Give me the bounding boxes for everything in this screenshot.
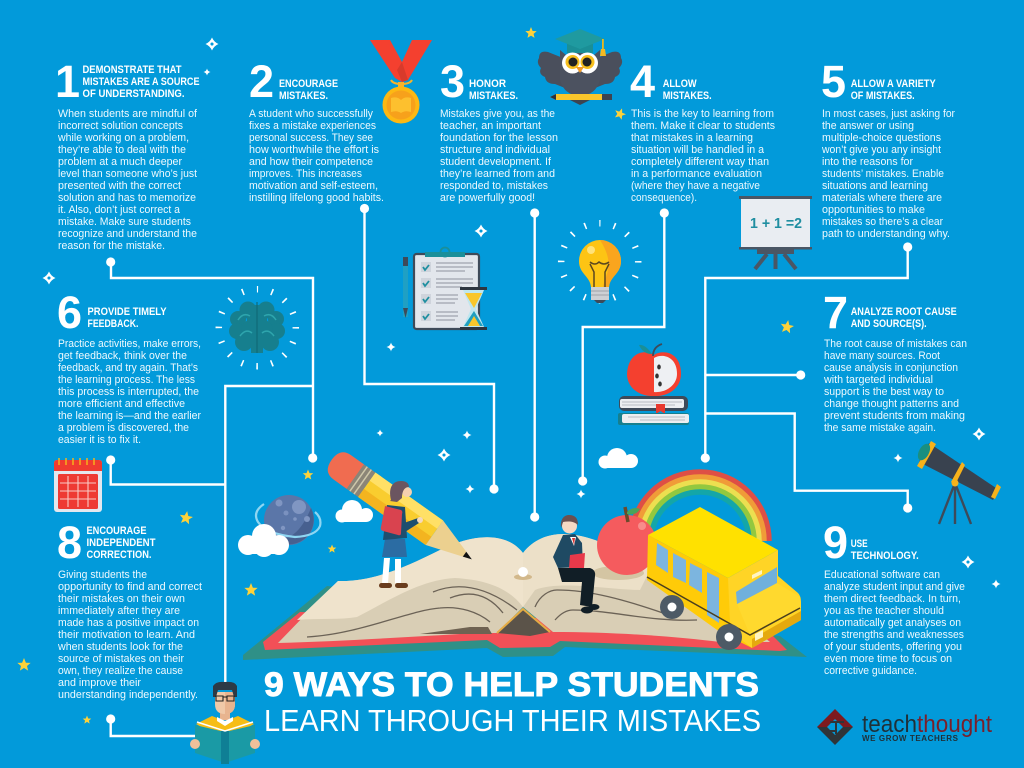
panel: tip 5 (821, 56, 955, 240)
body 6 (58, 338, 201, 446)
body 5: situations and learning (822, 180, 928, 192)
body 7: The root cause of mistakes can (824, 338, 967, 350)
body 9: analyze student input and give (824, 581, 965, 593)
heading 1 (82, 64, 200, 100)
icon: clipboard and hourglass (403, 248, 487, 330)
body 8: opportunity to find and correct (58, 581, 202, 593)
body 1: solution and has to memorize (58, 192, 196, 204)
body 6: easier it is to fix it. (58, 434, 141, 446)
body 9: automatically get analyses on (824, 617, 961, 629)
heading 5 (851, 78, 936, 102)
body 2: how worthwhile the effort is (249, 144, 380, 156)
heading 9: TECHNOLOGY. (851, 550, 919, 562)
body 7: cause analysis in conjunction (824, 362, 958, 374)
body 4: them. Make it clear to students (631, 120, 776, 132)
heading 9 (851, 538, 919, 562)
number 5: 5 (821, 56, 846, 107)
body 8: when students look for the (57, 641, 183, 653)
icon: owl with graduation cap (538, 29, 622, 105)
body 3: are powerfully good! (440, 192, 535, 204)
heading 6: FEEDBACK. (88, 318, 139, 330)
body 2 (249, 108, 384, 204)
body 9: Educational software can (824, 569, 940, 581)
body 5: the answer or using (822, 120, 914, 132)
number 2: 2 (249, 56, 274, 107)
body 2: personal success. They see (249, 132, 373, 144)
illustration: girl with backpack (379, 481, 423, 588)
panel: tip 6 (57, 287, 201, 446)
icon: calendar (54, 458, 102, 512)
body 4: This is the key to learning from (631, 108, 774, 120)
panel: tip 8 (57, 517, 202, 701)
body 3: Mistakes give you, as the (440, 108, 555, 120)
body 3: student development. If (440, 156, 552, 168)
body 1: they’re able to deal with the (58, 144, 186, 156)
illustration: teacher reading (190, 682, 260, 764)
body 8: own, they realize the cause (58, 665, 183, 677)
heading 1: MISTAKES ARE A SOURCE (82, 76, 200, 88)
body 5: into the reasons for (822, 156, 913, 168)
body 2: A student who successfully (249, 108, 374, 120)
heading 2: ENCOURAGE (279, 78, 338, 90)
heading 6 (88, 306, 166, 330)
body 6: the learning is—and the earlier (58, 410, 201, 422)
body 3: responded to, mistakes (440, 180, 549, 192)
heading 5: ALLOW A VARIETY (851, 78, 936, 90)
body 5: materials where there are (822, 192, 942, 204)
heading 5: OF MISTAKES. (851, 90, 915, 102)
body 1: mistake. Make sure students (58, 216, 192, 228)
panel: tip 3 (440, 56, 558, 204)
number 6: 6 (57, 287, 82, 338)
heading 7: AND SOURCE(S). (851, 318, 927, 330)
body 6: this process is interrupted, the (58, 386, 199, 398)
body 7: the same mistake again. (824, 422, 936, 434)
body 4: (where they have a negative (631, 180, 760, 192)
number 7: 7 (823, 287, 848, 338)
heading 8: CORRECTION. (86, 549, 152, 561)
heading 7: ANALYZE ROOT CAUSE (851, 306, 957, 318)
body 1: reason for the mistake. (58, 240, 165, 252)
body 8: Giving students the (58, 569, 147, 581)
panel: tip 7 (823, 287, 967, 434)
body 2: and how their competence (249, 156, 373, 168)
body 7: prevent students from making (824, 410, 965, 422)
panel: tip 4 (630, 56, 776, 204)
body 5: won’t give you any insight (821, 144, 941, 156)
body 7: with targeted individual (823, 374, 933, 386)
number 1: 1 (55, 56, 80, 107)
body 8 (57, 569, 202, 701)
body 8: source of mistakes on their (58, 653, 184, 665)
body 1 (57, 108, 198, 252)
heading 8: INDEPENDENT (86, 537, 156, 549)
body 5: opportunities to make (822, 204, 925, 216)
body 5: mistakes so there’s a clear (822, 216, 943, 228)
logo: teachthought (817, 709, 992, 745)
body 6: feedback, and try again. That’s (58, 362, 199, 374)
body 8: made has a positive impact on (58, 617, 199, 629)
body 6: Practice activities, make errors, (58, 338, 201, 350)
heading 1: DEMONSTRATE THAT (82, 64, 182, 76)
heading 8: ENCOURAGE (86, 525, 146, 537)
body 6: a problem is discovered, the (58, 422, 189, 434)
title: LEARN THROUGH THEIR MISTAKES (264, 704, 761, 738)
panel: tip 9 (823, 517, 965, 677)
heading 2: MISTAKES. (279, 90, 328, 102)
number 9: 9 (823, 517, 848, 568)
body 4: situation will be handled in a (631, 144, 764, 156)
number 8: 8 (57, 517, 82, 568)
body 9 (824, 569, 965, 677)
title (264, 666, 761, 738)
heading 3 (469, 78, 518, 102)
panel: tip 2 (249, 56, 384, 204)
icon: chalkboard (739, 196, 812, 269)
icon: brain (219, 289, 296, 366)
body 9: corrective guidance. (824, 665, 917, 677)
body 8: immediately after they are (58, 605, 180, 617)
connector lines (106, 204, 912, 736)
illustration: boy reading (553, 515, 600, 614)
icon: chalkboard: 1 + 1 =2 (750, 215, 802, 232)
body 7: change thought patterns and (824, 398, 959, 410)
body 9: you as the teacher should (824, 605, 944, 617)
body 9: of your students, offering you (824, 641, 962, 653)
heading 7 (851, 306, 957, 330)
body 5: In most cases, just asking for (822, 108, 955, 120)
body 1: incorrect solution concepts (58, 120, 184, 132)
body 4: in a performance evaluation (631, 168, 762, 180)
body 6: get feedback, think over the (58, 350, 187, 362)
icon: cloud near apple (598, 448, 638, 468)
heading 3: MISTAKES. (469, 90, 518, 102)
title: 9 WAYS TO HELP STUDENTS (264, 666, 759, 704)
number 3: 3 (440, 56, 465, 107)
icon: cloud near pencil (336, 500, 373, 522)
body 2: motivation and self-esteem, (249, 180, 378, 192)
icon: telescope (915, 441, 1001, 524)
heading 4 (663, 78, 712, 102)
heading 8 (86, 525, 156, 561)
icon: light bulb (561, 223, 638, 303)
illustration: big pencil (323, 448, 481, 572)
body 4: that mistakes in a learning (631, 132, 753, 144)
body 9: even more time to focus on (824, 653, 952, 665)
body 8: their motivation to learn. And (58, 629, 195, 641)
icon: medal (370, 40, 432, 124)
body 3: teacher, an important (440, 120, 541, 132)
icon: planet (256, 495, 320, 545)
body 3: structure and individual (440, 144, 550, 156)
body 9: them direct feedback. In turn, (824, 593, 961, 605)
body 4: completely different way than (631, 156, 769, 168)
heading 1: OF UNDERSTANDING. (82, 88, 185, 100)
body 3 (440, 108, 558, 204)
body 5: students’ mistakes. Enable (822, 168, 944, 180)
body 7: support is the best way to (824, 386, 944, 398)
body 1: it. Also, don’t just correct a (58, 204, 180, 216)
body 7 (823, 338, 967, 434)
body 5: multiple-choice questions (822, 132, 942, 144)
body 2: improves. This increases (249, 168, 363, 180)
body 7: have many sources. Root (824, 350, 940, 362)
body 4: consequence). (631, 192, 697, 204)
body 1: while working on a problem, (57, 132, 189, 144)
body 8: understanding independently. (58, 689, 198, 701)
icon: cloud near planet (238, 524, 289, 557)
body 3: they’re learned from and (440, 168, 555, 180)
heading 2 (279, 78, 338, 102)
heading 4: ALLOW (663, 78, 697, 90)
icon: apple and books (618, 344, 689, 425)
body 9: the strengths and weaknesses (824, 629, 965, 641)
number 4: 4 (630, 56, 655, 107)
heading 3: HONOR (469, 78, 506, 90)
body 3: foundation for the lesson (440, 132, 558, 144)
panel: tip 1 (55, 56, 200, 252)
body 2: fixes a mistake experiences (249, 120, 377, 132)
body 6: more efficient and effective (58, 398, 185, 410)
body 4 (631, 108, 776, 204)
body 5 (821, 108, 955, 240)
logo: teachthought: WE GROW TEACHERS (862, 734, 959, 743)
illustration: school bus (647, 507, 801, 650)
body 1: When students are mindful of (58, 108, 198, 120)
body 1: level than someone who’s just (58, 168, 197, 180)
body 1: problem at a much deeper (58, 156, 182, 168)
body 2: instilling lifelong good habits. (249, 192, 384, 204)
heading 4: MISTAKES. (663, 90, 712, 102)
body 8: their mistakes on their own (58, 593, 185, 605)
logo: teachthought: teachthought (862, 711, 992, 738)
body 8: and improve their (58, 677, 141, 689)
illustration: rainbow (631, 472, 769, 541)
body 5: path to understanding why. (822, 228, 950, 240)
heading 6: PROVIDE TIMELY (88, 306, 166, 318)
body 6: the learning process. The less (58, 374, 196, 386)
body 1: recognize and understand the (58, 228, 197, 240)
illustration: open book (243, 534, 807, 660)
heading 9: USE (851, 538, 868, 550)
body 1: presented with the correct (58, 180, 181, 192)
illustration: big red apple (597, 507, 657, 575)
